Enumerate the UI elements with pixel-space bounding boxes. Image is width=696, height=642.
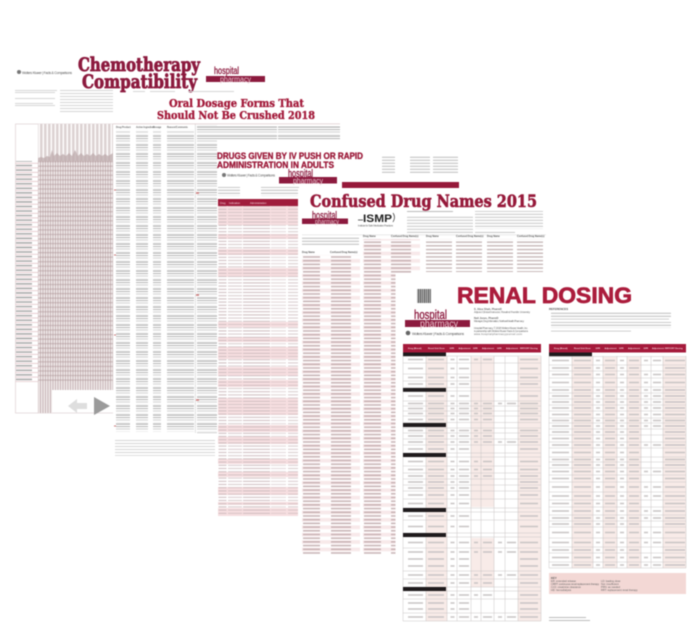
table header right (549, 344, 686, 352)
cell text left (408, 360, 538, 617)
table: confused names column 2: Confused Drug Name(s) (391, 235, 419, 238)
table: oral dosage left: Dosage (153, 127, 162, 129)
footnote (549, 617, 590, 621)
logo: Wolters Kluwer: Wolters Kluwer | Facts & Comparisons (22, 71, 72, 75)
logo: hospital pharmacy: hospital (414, 307, 447, 322)
table: confused names column 3: Confused Drug Name(s) (456, 235, 484, 238)
table header right: GFR (619, 348, 624, 350)
intro text (218, 187, 299, 196)
table header left: GFR (450, 348, 455, 350)
panel: chemotherapy compatibility sheet (15, 54, 265, 415)
title: oral dosage forms: Should Not Be Crushed 2018 (157, 109, 315, 122)
table header left: Adjustment (482, 347, 494, 350)
arrow: next (94, 397, 110, 415)
key box: KEY (551, 576, 557, 580)
authors: Manager, Drug Information, Northwell Health Pharmacy (474, 319, 525, 323)
title: oral dosage forms: Oral Dosage Forms That (169, 97, 305, 110)
references block (382, 156, 458, 174)
title: confused drug names: Confused Drug Names 2015 (310, 192, 537, 212)
title: chemotherapy compatibility: Chemotherapy (78, 54, 201, 76)
key box: ER: extended release (551, 579, 577, 583)
table header left: Drug (Brand) (408, 348, 422, 350)
arrow: previous (68, 399, 87, 413)
logo: ISMP (358, 213, 394, 228)
logo: hospital pharmacy (405, 307, 470, 330)
table: oral dosage left: Reason/Comments (167, 126, 189, 129)
table: confused names column 4 (487, 235, 545, 272)
compatibility grid header columns (16, 124, 114, 413)
table: confused names column 4: Confused Drug Name(s) (517, 235, 545, 238)
table: confused names column 3 (426, 235, 484, 272)
row shading left (426, 357, 541, 621)
key box: RRT: replacement renal therapy (601, 588, 638, 592)
logo: hospital pharmacy (206, 66, 265, 84)
table header left: RRT/CRT Dosing (520, 348, 538, 350)
table header left: Adjustment (458, 347, 471, 350)
row lines left (403, 356, 541, 621)
panel: oral dosage forms sheet (113, 97, 340, 460)
title: chemotherapy compatibility (78, 54, 201, 93)
logo: hospital pharmacy: pharmacy (293, 176, 323, 186)
row shading right (572, 357, 686, 568)
authors: Adjunct Clinical Instructor, Rosalind Franklin University (474, 310, 531, 314)
sheet background (113, 122, 217, 460)
logo: hospital pharmacy: pharmacy (420, 319, 458, 330)
table: oral dosage right (196, 124, 340, 433)
authors: Hospital Pharmacy, © 2018 Wolters Kluwer Health, Inc. (474, 326, 528, 330)
section bars left (403, 352, 446, 591)
logo: hospital pharmacy: hospital (312, 210, 337, 222)
logo: hospital pharmacy: pharmacy (220, 75, 251, 84)
footnotes (115, 440, 215, 456)
references (549, 307, 671, 332)
authors (474, 307, 531, 336)
table: confused names column 2: Drug Name (363, 235, 376, 238)
authors: in partnership with Wolters Kluwer Facts & Comparisons (474, 329, 529, 333)
panel: confused drug names sheet (298, 189, 548, 563)
logo: Wolters Kluwer: Wolters Kluwer | Facts & Comparisons (227, 174, 275, 178)
table header left: GFR (473, 348, 478, 350)
sheet background (396, 273, 696, 642)
title: chemotherapy compatibility: Compatibility (82, 71, 198, 93)
title: drugs given by IV push (217, 151, 363, 170)
table: confused names column 4: Drug Name (487, 235, 500, 238)
logo: hospital pharmacy: pharmacy (315, 217, 339, 226)
authors: S. Alice Shah, PharmD (474, 307, 502, 311)
logo: Wolters Kluwer: Wolters Kluwer | Facts & Comparisons (412, 332, 464, 336)
table header bar: Administration (250, 201, 267, 205)
authors: Neil Jones, PharmD (474, 316, 498, 320)
sheet background (298, 189, 548, 557)
table header bar: Drug (220, 201, 226, 205)
key box: CrCl: creatinine clearance (551, 585, 581, 589)
table header bar: Indication (229, 201, 241, 205)
key box (549, 573, 686, 594)
table header left: Renal Unit Dose (428, 347, 446, 350)
table header right: Adjustment (652, 347, 664, 350)
table header bar (218, 182, 459, 206)
logo: ISMP: ISMP (363, 213, 392, 225)
title: oral dosage forms (157, 97, 315, 122)
sheet background (217, 148, 462, 518)
logo: hospital pharmacy (302, 210, 348, 226)
row lines right (549, 356, 686, 568)
table: confused names column 3: Drug Name (426, 235, 439, 238)
logo: hospital pharmacy (279, 168, 337, 186)
references: REFERENCES (549, 307, 568, 311)
table header left: GFR (497, 348, 502, 350)
key box: HD: hemodialysis (551, 588, 572, 592)
table header right: RRT/CRT Dosing (665, 348, 683, 350)
table header left: Adjustment (506, 347, 518, 350)
key box: LD: loading dose (601, 579, 621, 583)
key box: Not: insufficient (601, 582, 619, 586)
cell text right (552, 360, 685, 565)
table header right: GFR (644, 348, 649, 350)
table: renal dosing right (549, 344, 686, 568)
table header left (403, 344, 541, 352)
table header right: Adjustment (604, 347, 617, 350)
table: oral dosage left (113, 124, 340, 433)
authors: www.hospitalpharmacyjournal.com (474, 332, 522, 336)
key box: PRN: as needed (601, 585, 621, 589)
panel: IV push sheet (217, 148, 462, 518)
logo: hospital pharmacy: hospital (288, 168, 313, 180)
barcode (417, 289, 431, 303)
compatibility grid body (16, 161, 113, 413)
title: drugs given by IV push: DRUGS GIVEN BY IV PUSH OR RAPID (217, 151, 363, 161)
intro text columns (302, 211, 546, 246)
logo: ISMP: Institute for Safe Medication Practices (358, 224, 394, 228)
intro text (15, 90, 234, 112)
table: confused names column 1 (302, 251, 360, 555)
table header right: Drug (Brand) (554, 348, 568, 350)
logo: hospital pharmacy: hospital (214, 66, 239, 77)
table: confused names column 1: Drug Name (302, 251, 315, 254)
table rows (218, 206, 298, 516)
table: oral dosage left: Drug Product (116, 126, 131, 129)
table: confused names column 1: Confused Drug Name(s) (330, 251, 358, 254)
section bar right (549, 352, 592, 356)
logo: Wolters Kluwer (406, 331, 464, 336)
table header right: Renal Unit Dose (574, 347, 592, 350)
title: renal dosing: RENAL DOSING (457, 283, 632, 308)
table: renal dosing left (403, 344, 541, 621)
table: confused names column 2 (363, 235, 426, 563)
panel: renal dosing sheet (396, 273, 696, 642)
table: oral dosage left: Active Ingredient (136, 126, 155, 129)
table header right: GFR (596, 348, 601, 350)
title: drugs given by IV push: ADMINISTRATION IN ADULTS (217, 160, 334, 170)
key box: CRRT: continuous renal replacement therapy (551, 582, 600, 586)
table header right: Adjustment (628, 347, 640, 350)
